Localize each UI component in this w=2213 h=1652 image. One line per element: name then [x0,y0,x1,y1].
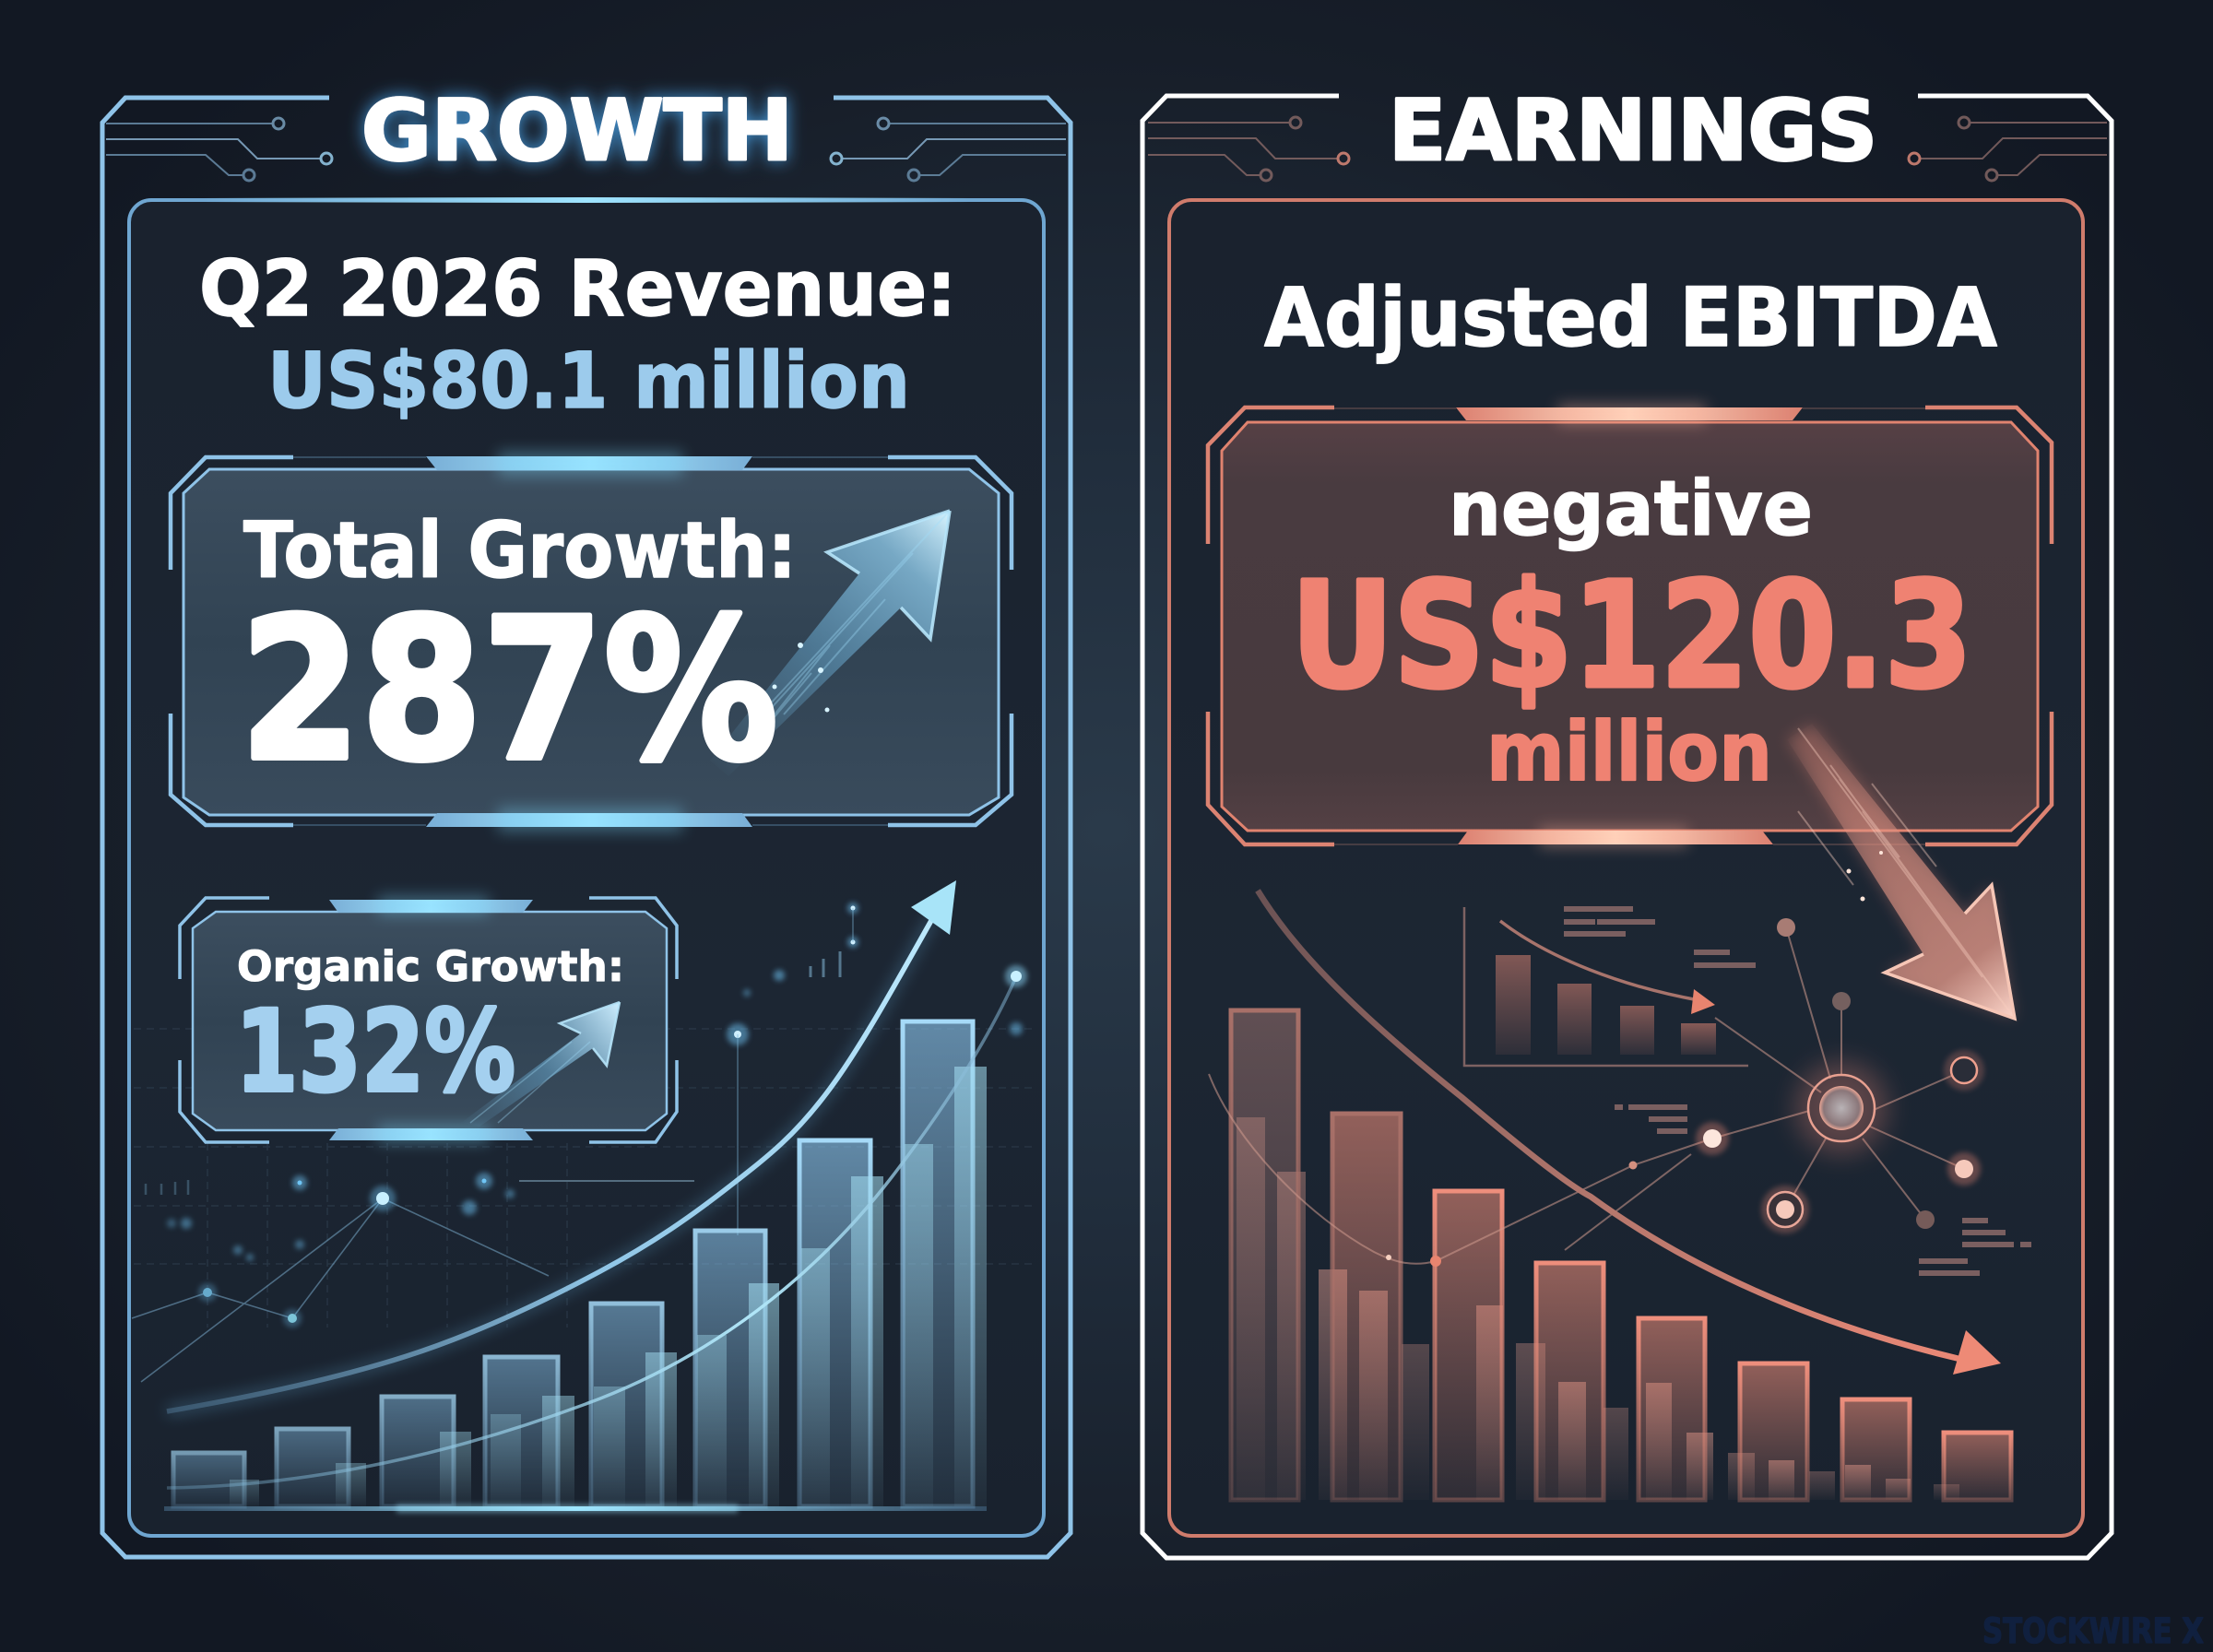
adjusted ebitda label: Adjusted EBITDA [1264,270,1997,365]
earnings outer frame [1142,96,2112,1558]
earnings bar chart [1231,1010,2011,1500]
total growth card frame [171,452,1012,832]
falling trend arrow [1258,891,2001,1375]
growth outer frame [102,98,1071,1557]
organic growth label: Organic Growth: [237,942,624,991]
earnings inner panel [1169,200,2083,1536]
total growth value: 287% [240,576,778,804]
small inset bar chart [1464,907,1748,1066]
total growth card [171,452,1012,832]
placeholder text lines [1564,906,2031,1276]
ebitda value: US$120.3 [1291,551,1972,721]
thin secondary trend line [167,965,1027,1488]
rising trend arrow [167,880,956,1411]
circuit traces right [1909,117,2107,181]
ebitda card frame [1208,404,2052,847]
circuit traces right [831,118,1066,181]
small network graph [132,1186,549,1382]
icon: total growth arrow [710,511,950,776]
icon: big falling arrow [1787,724,2015,1019]
circuit traces left [1148,117,1349,181]
negative label: negative [1449,466,1813,553]
total growth label: Total Growth: [243,505,797,596]
revenue label: Q2 2026 Revenue: [199,243,956,334]
circuit traces left [106,118,332,181]
growth bar chart [173,1021,987,1506]
panel: growth [102,83,1071,1557]
organic growth card [180,896,677,1143]
organic growth card frame [180,896,677,1143]
chart base line [164,1504,987,1513]
icon: organic growth arrow [461,1002,620,1127]
decorative glow dots [146,903,1023,1261]
million unit: million [1486,704,1772,799]
growth title: GROWTH [361,83,793,180]
growth inner panel [129,197,1044,1536]
earnings title: EARNINGS [1389,83,1877,180]
network diagram [1209,918,1984,1267]
chart grid [134,1029,1037,1328]
revenue value: US$80.1 million [267,336,910,426]
ebitda card [1208,404,2052,847]
organic growth value: 132% [235,986,515,1117]
panel: earnings [1142,83,2112,1558]
